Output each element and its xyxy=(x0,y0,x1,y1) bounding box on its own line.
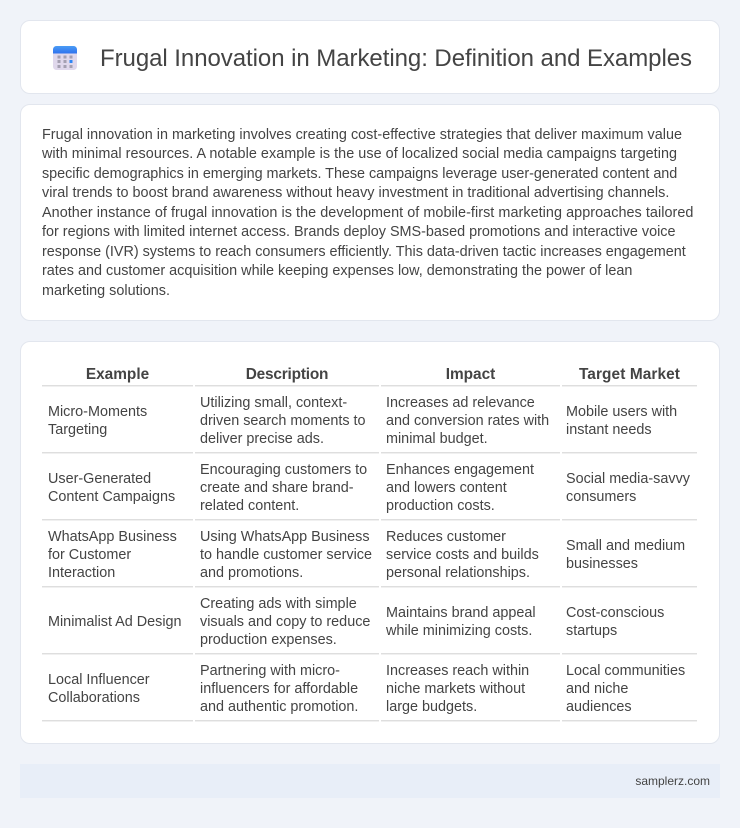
row: Local Influencer Collaborations: influencers for affordable xyxy=(200,681,358,697)
panel: intro paragraph: specific demographics in emerging markets. These campaigns leverage user-generated content and xyxy=(42,166,677,182)
row: User-Generated Content Campaigns: create and share brand- xyxy=(200,480,354,496)
row: User-Generated Content Campaigns xyxy=(48,462,690,514)
row: Minimalist Ad Design xyxy=(48,596,664,648)
footer text: samplerz.com xyxy=(635,774,710,788)
row: User-Generated Content Campaigns: Social media-savvy xyxy=(566,471,690,487)
row: User-Generated Content Campaigns: production costs. xyxy=(386,498,495,514)
row: WhatsApp Business xyxy=(48,529,685,581)
row: Local Influencer Collaborations xyxy=(48,663,685,715)
panel: intro paragraph: rates and customer acquisition while keeping expenses low, demonstrating the power of lean xyxy=(42,263,632,279)
row: WhatsApp Business: to handle customer service xyxy=(200,547,372,563)
row: Local Influencer Collaborations: Local communities xyxy=(566,663,685,679)
row: Minimalist Ad Design: while minimizing costs. xyxy=(386,623,532,639)
panel: table card xyxy=(20,341,720,744)
row: Local Influencer Collaborations: audiences xyxy=(566,699,632,715)
row: WhatsApp Business: for Customer xyxy=(48,547,131,563)
header panel xyxy=(20,20,720,94)
column heading: Impact: Impact xyxy=(446,366,495,383)
row: Local Influencer Collaborations: large budgets. xyxy=(386,699,477,715)
row: Local Influencer Collaborations: Local Influencer xyxy=(48,672,150,688)
row: WhatsApp Business: Small and medium xyxy=(566,538,685,554)
row: Minimalist Ad Design: Cost-conscious xyxy=(566,605,664,621)
panel: intro paragraph: viral trends to boost brand awareness without heavy investment in traditional advertising channels. xyxy=(42,185,669,201)
row: Micro-Moments Targeting: Increases ad relevance xyxy=(386,395,535,411)
row: Minimalist Ad Design: Maintains brand appeal xyxy=(386,605,536,621)
row: User-Generated Content Campaigns: Encouraging customers to xyxy=(200,462,367,478)
row: Minimalist Ad Design: startups xyxy=(566,623,617,639)
row: User-Generated Content Campaigns: and lowers content xyxy=(386,480,507,496)
row: User-Generated Content Campaigns: Enhances engagement xyxy=(386,462,534,478)
icon: calendar xyxy=(53,46,77,70)
column heading: Target Market: Target Market xyxy=(579,366,680,383)
panel: intro paragraph: with minimal resources. A notable example is the use of localized social media campaigns targeting xyxy=(42,146,677,162)
row: Micro-Moments Targeting xyxy=(48,395,677,447)
row: User-Generated Content Campaigns: consumers xyxy=(566,489,636,505)
column heading: Example: Example xyxy=(86,366,149,383)
row: WhatsApp Business: WhatsApp Business xyxy=(48,529,177,545)
row: Minimalist Ad Design: visuals and copy to reduce xyxy=(200,614,370,630)
row: WhatsApp Business: Reduces customer xyxy=(386,529,506,545)
panel: intro paragraph xyxy=(20,104,720,321)
row: Micro-Moments Targeting: and conversion rates with xyxy=(386,413,549,429)
panel: intro paragraph: Frugal innovation in marketing involves creating cost-effective strategies that deliver maximum value xyxy=(42,127,682,143)
column heading: Description: Description xyxy=(246,366,328,383)
row: Micro-Moments Targeting: driven search moments to xyxy=(200,413,366,429)
panel: intro paragraph: Another instance of frugal innovation is the development of mobile-first marketing approaches tailored xyxy=(42,205,693,221)
row: User-Generated Content Campaigns: Content Campaigns xyxy=(48,489,175,505)
row: Micro-Moments Targeting: Targeting xyxy=(48,422,107,438)
panel: intro paragraph: for regions with limited internet access. Brands deploy SMS-based promotions and interactive voice xyxy=(42,224,676,240)
row: Minimalist Ad Design: Minimalist Ad Design xyxy=(48,614,182,630)
row: User-Generated Content Campaigns: related content. xyxy=(200,498,299,514)
footer bar xyxy=(20,764,720,798)
row: Micro-Moments Targeting: Micro-Moments xyxy=(48,404,147,420)
row: Micro-Moments Targeting: Utilizing small, context- xyxy=(200,395,347,411)
row: Minimalist Ad Design: Creating ads with simple xyxy=(200,596,357,612)
row: WhatsApp Business: service costs and builds xyxy=(386,547,539,563)
row: Micro-Moments Targeting: minimal budget. xyxy=(386,431,488,447)
row: Local Influencer Collaborations: Increases reach within xyxy=(386,663,529,679)
row: WhatsApp Business: Using WhatsApp Business xyxy=(200,529,370,545)
row: WhatsApp Business: and promotions. xyxy=(200,565,303,581)
row: WhatsApp Business: Interaction xyxy=(48,565,115,581)
row: Local Influencer Collaborations: Collaborations xyxy=(48,690,140,706)
panel: intro paragraph: response (IVR) systems to reach consumers efficiently. This data-driven tactic increases engagement xyxy=(42,244,686,260)
row: Local Influencer Collaborations: and authentic promotion. xyxy=(200,699,358,715)
row: WhatsApp Business: personal relationships. xyxy=(386,565,530,581)
row: Local Influencer Collaborations: and niche xyxy=(566,681,628,697)
row: Micro-Moments Targeting: deliver precise ads. xyxy=(200,431,324,447)
row: Local Influencer Collaborations: Partnering with micro- xyxy=(200,663,340,679)
row: WhatsApp Business: businesses xyxy=(566,556,638,572)
panel: intro paragraph: marketing solutions. xyxy=(42,283,170,299)
title: Frugal Innovation in Marketing: Definition and Examples xyxy=(100,45,692,72)
row: Minimalist Ad Design: production expenses. xyxy=(200,632,337,648)
row: User-Generated Content Campaigns: User-Generated xyxy=(48,471,151,487)
row: Local Influencer Collaborations: niche markets without xyxy=(386,681,525,697)
row: Micro-Moments Targeting: Mobile users with xyxy=(566,404,677,420)
row: Micro-Moments Targeting: instant needs xyxy=(566,422,652,438)
